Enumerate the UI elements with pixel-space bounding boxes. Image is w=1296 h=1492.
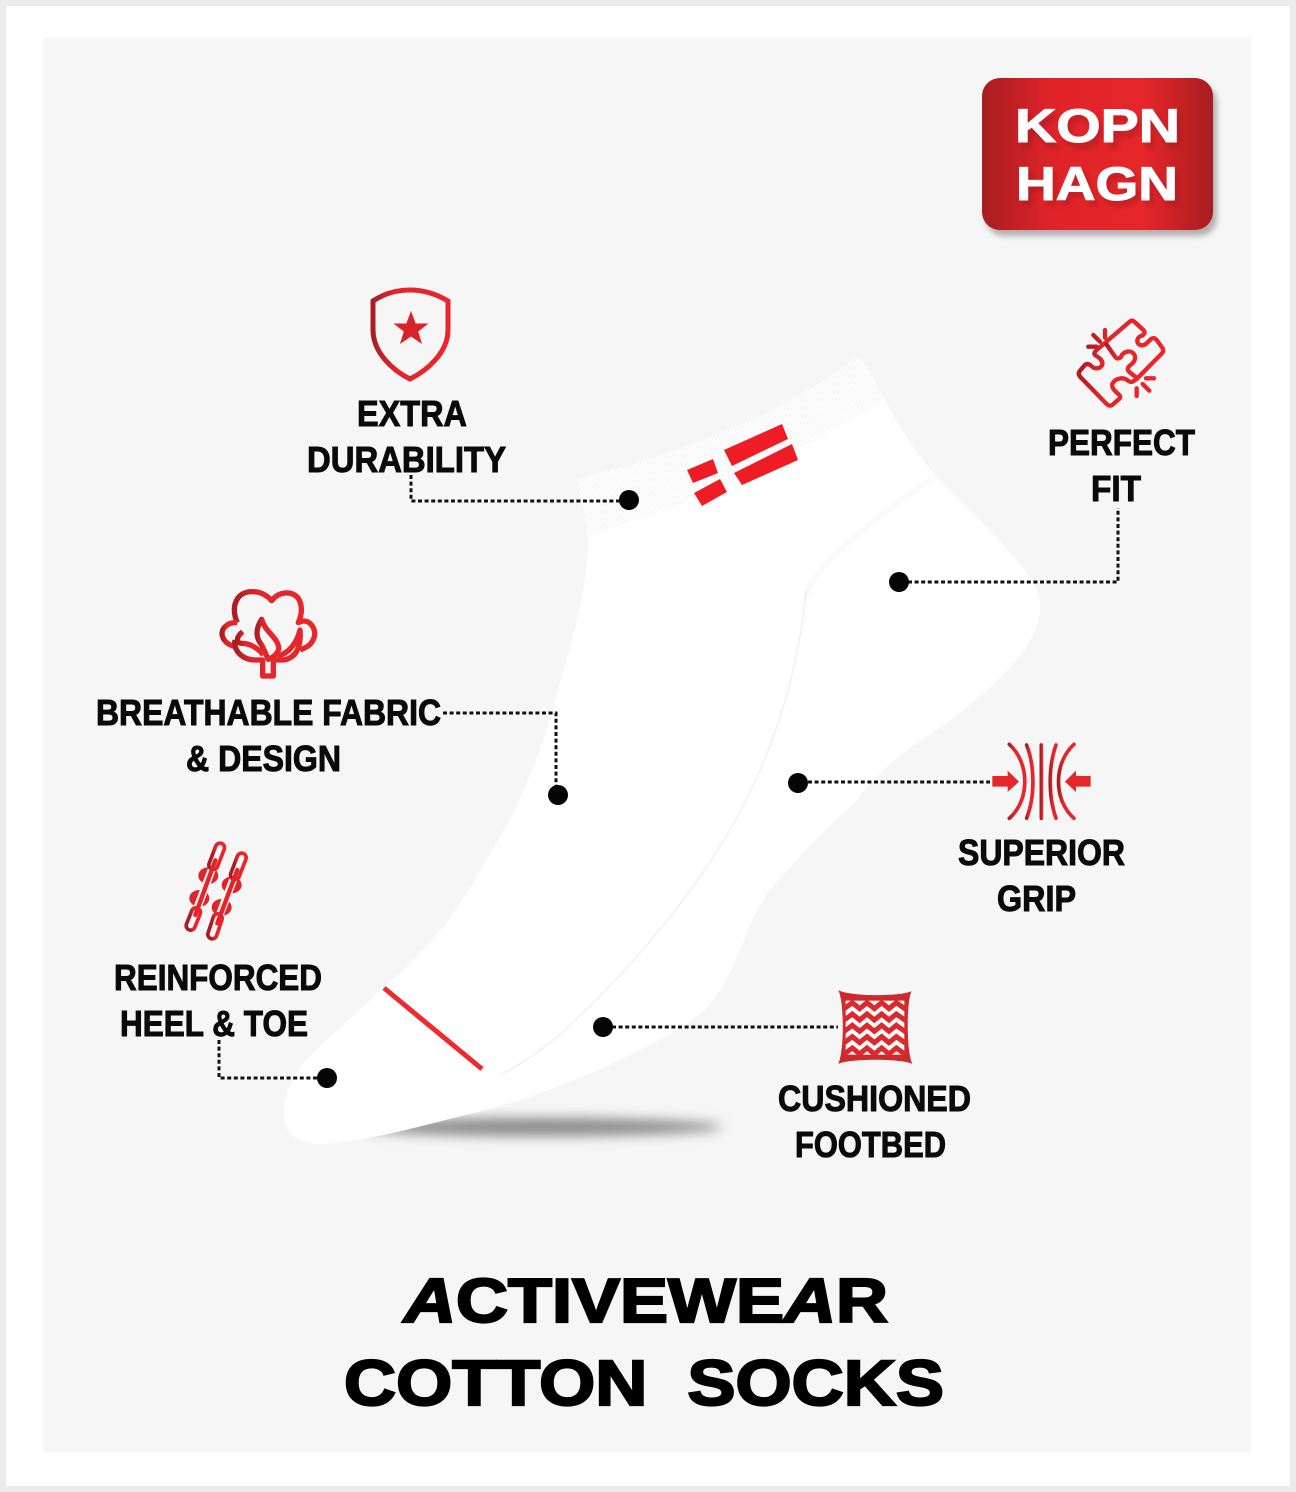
icon: compression arrows: [992, 744, 1091, 818]
label: EXTRA: [357, 393, 467, 434]
callout: breathable fabric and design: & DESIGN: [186, 738, 341, 779]
label: CUSHIONED: [778, 1078, 971, 1119]
sock ground shadow: [358, 1118, 722, 1136]
icon: cushion: [838, 990, 912, 1064]
title: [344, 1267, 944, 1419]
callout: cushioned footbed: [593, 990, 971, 1165]
title: COTTON SOCKS: [344, 1347, 944, 1419]
icon: chain links: [189, 848, 242, 934]
label: REINFORCED: [114, 957, 322, 998]
callout: perfect fit: [889, 321, 1195, 592]
label: SUPERIOR: [958, 832, 1125, 873]
icon: cotton boll: [222, 592, 315, 676]
sock illustration: [284, 355, 1040, 1144]
logo badge: KOPN HAGN: KOPN: [1019, 105, 1184, 158]
logo badge: KOPN HAGN: HAGN: [1020, 162, 1182, 215]
icon: puzzle pieces: [1079, 321, 1163, 406]
callout: superior grip: [788, 744, 1125, 919]
callout: reinforced heel and toe: [114, 848, 337, 1088]
callout: cushioned footbed: FOOTBED: [795, 1124, 946, 1165]
callout: perfect fit: FIT: [1091, 468, 1141, 509]
callout: extra durability: [307, 290, 639, 510]
callout: superior grip: GRIP: [997, 878, 1076, 919]
red toe line: [384, 988, 482, 1069]
callout: reinforced heel and toe: HEEL & TOE: [120, 1003, 308, 1044]
logo badge: KOPN HAGN: [982, 78, 1217, 236]
callout: breathable fabric and design: [96, 592, 568, 805]
logo badge: KOPN HAGN: HAGN: [1016, 157, 1178, 210]
icon: shield with star: [373, 290, 448, 379]
label: PERFECT: [1048, 422, 1195, 463]
label: BREATHABLE FABRIC: [96, 692, 441, 733]
title: ACTIVEWE AR: [402, 1267, 888, 1336]
flag embroidery on cuff: [687, 424, 798, 506]
logo badge: KOPN HAGN: KOPN: [1015, 99, 1180, 152]
callout: extra durability: DURABILITY: [307, 439, 506, 480]
